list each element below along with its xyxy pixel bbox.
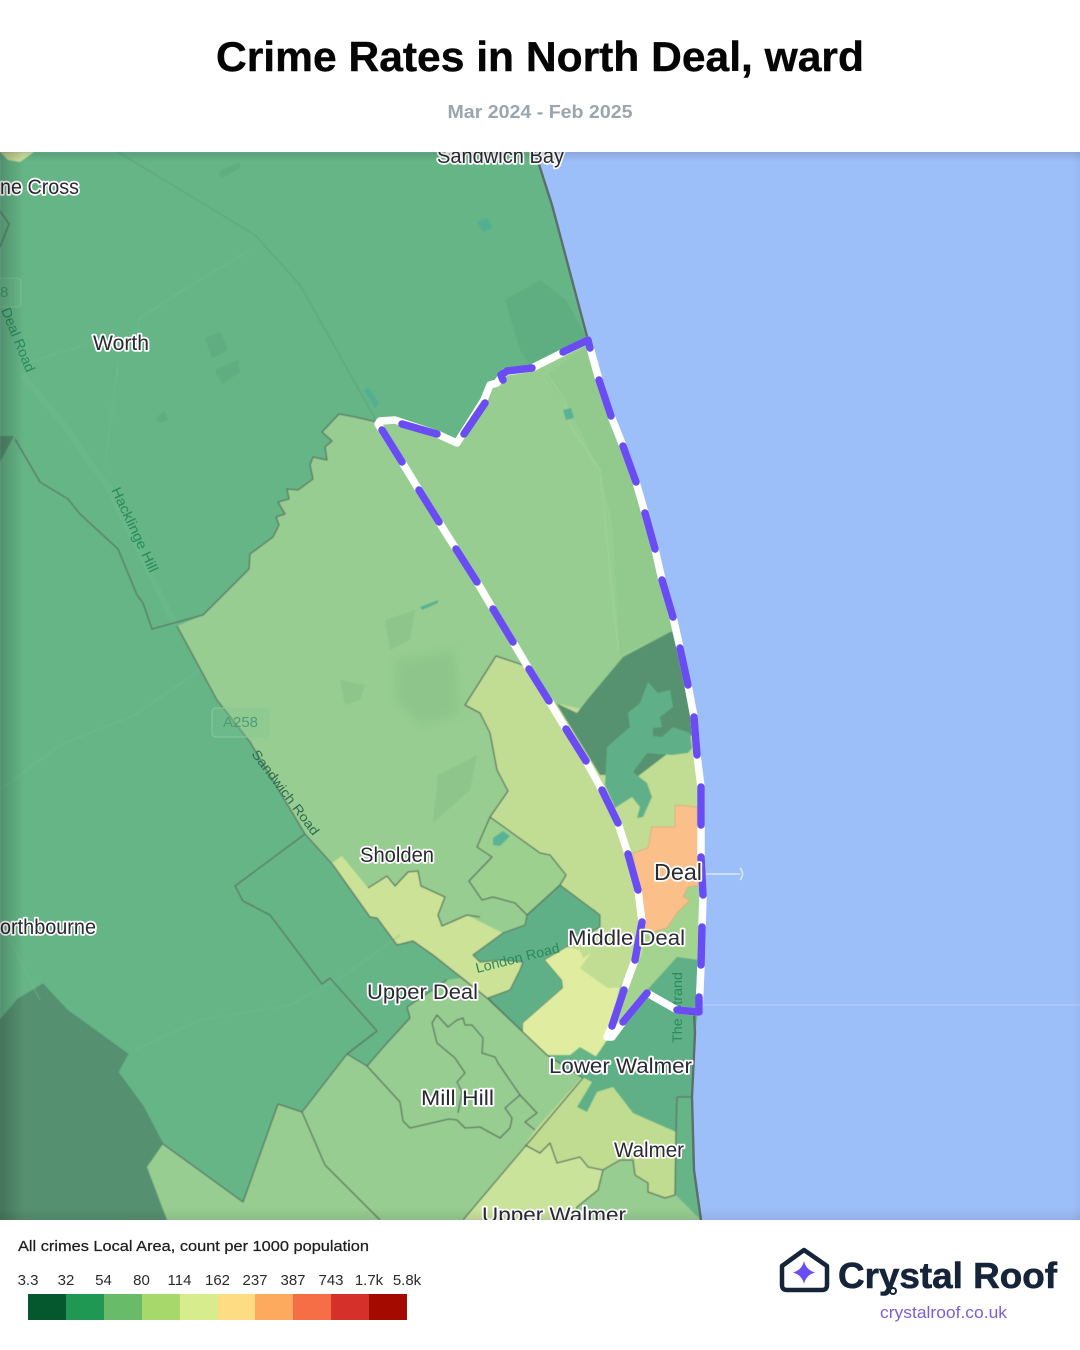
place labels: Upper Walmer — [482, 1204, 626, 1227]
field and woodland patches — [340, 610, 477, 823]
land base: mid-green wards — [0, 152, 702, 1220]
legend tick values: 114 — [168, 1272, 191, 1289]
dark green ward north of Deal — [556, 631, 692, 790]
road label: Sandwich Road: Sandwich Road — [249, 747, 323, 838]
place labels: Deal — [654, 859, 702, 885]
logo y-tail ring — [890, 1288, 896, 1294]
subtitle: date range: Mar 2024 - Feb 2025 — [448, 102, 632, 122]
lighter road in the north ward — [548, 377, 559, 392]
ward outline: North Deal — [378, 340, 703, 1037]
mid green ward Lower Walmer — [577, 960, 676, 1112]
place labels: Upper Deal — [367, 981, 478, 1004]
pale ward top-left corner — [0, 152, 34, 162]
legend tick values: 80 — [133, 1272, 150, 1289]
slightly darker coastal strip — [545, 345, 672, 655]
logo: Crystal Roof — [782, 1250, 1058, 1322]
place labels: ne Cross — [0, 176, 79, 199]
legend tick values — [18, 1272, 422, 1289]
legend tick values: 5.8k — [393, 1272, 422, 1289]
map edge shading — [0, 152, 1080, 1220]
pale green ward west of Deal — [465, 656, 701, 988]
road label: Hacklinge Hill: Hacklinge Hill — [108, 485, 162, 575]
icon: house with star — [782, 1250, 827, 1290]
legend tick values: 1.7k — [355, 1272, 384, 1289]
road label: The Strand: The Strand — [669, 972, 685, 1043]
road label: London Road: London Road — [474, 940, 561, 976]
title: Crime Rates in North Deal, ward — [216, 33, 864, 80]
place labels: Lower Walmer — [549, 1055, 692, 1078]
place labels: Worth — [93, 332, 149, 355]
legend tick values: 3.3 — [18, 1272, 38, 1289]
road network — [34, 934, 400, 1000]
road shield A258 — [212, 708, 269, 737]
pale green ward Upper Walmer — [463, 1143, 603, 1220]
logo wordmark: Crystal Roof — [838, 1255, 1058, 1296]
faint horizontal line over the sea — [703, 1004, 1080, 1006]
legend tick values: 387 — [280, 1272, 306, 1289]
legend tick values: 32 — [58, 1272, 74, 1289]
thin lines over the sea — [706, 868, 742, 880]
pale yellow ward — [523, 947, 620, 1057]
mid green ward north of Deal — [605, 682, 692, 818]
road shield A258: A258 — [223, 714, 258, 731]
purple dashes — [382, 340, 703, 1026]
legend tick values: 237 — [242, 1272, 268, 1289]
place labels: orthbourne — [0, 916, 96, 939]
light green ward south-east of Deal — [616, 885, 700, 1024]
place labels: Mill Hill — [421, 1087, 494, 1110]
place labels: Sandwich Bay — [437, 145, 564, 168]
light ward: Sholden and North Deal — [177, 346, 673, 933]
pale green ward Walmer — [525, 1077, 676, 1198]
ward boundary lines — [0, 152, 692, 1220]
sea — [0, 152, 1080, 1220]
legend title: All crimes Local Area, count per 1000 population — [18, 1238, 369, 1255]
coastline — [535, 152, 701, 1220]
map areas — [0, 152, 702, 1220]
field patches north-west — [155, 162, 240, 423]
pale green strip near Sholden — [332, 856, 523, 998]
dark fragment left edge — [0, 436, 14, 462]
place labels — [0, 145, 702, 1227]
mid green ward Middle Deal — [473, 885, 600, 1032]
darker patch north of the ward — [505, 280, 588, 368]
legend tick values: 162 — [205, 1272, 230, 1289]
place labels: Walmer — [614, 1139, 684, 1162]
legend tick values: 54 — [95, 1272, 112, 1289]
light ward: southern rural — [147, 978, 701, 1220]
website url: crystalroof.co.uk — [880, 1304, 1008, 1322]
legend colour scale — [28, 1294, 407, 1320]
road shield fragment — [0, 278, 21, 307]
orange ward: Deal town centre — [633, 805, 700, 932]
place labels: Middle Deal — [568, 927, 685, 950]
legend — [18, 1238, 422, 1320]
place labels: Sholden — [360, 844, 434, 867]
ponds — [364, 218, 574, 846]
dark ward bottom left — [0, 984, 167, 1220]
legend tick values: 743 — [318, 1272, 344, 1289]
white ward boundary — [378, 340, 703, 1037]
small ward by Sholden — [469, 817, 566, 915]
road shield fragment: 8 — [0, 284, 8, 301]
